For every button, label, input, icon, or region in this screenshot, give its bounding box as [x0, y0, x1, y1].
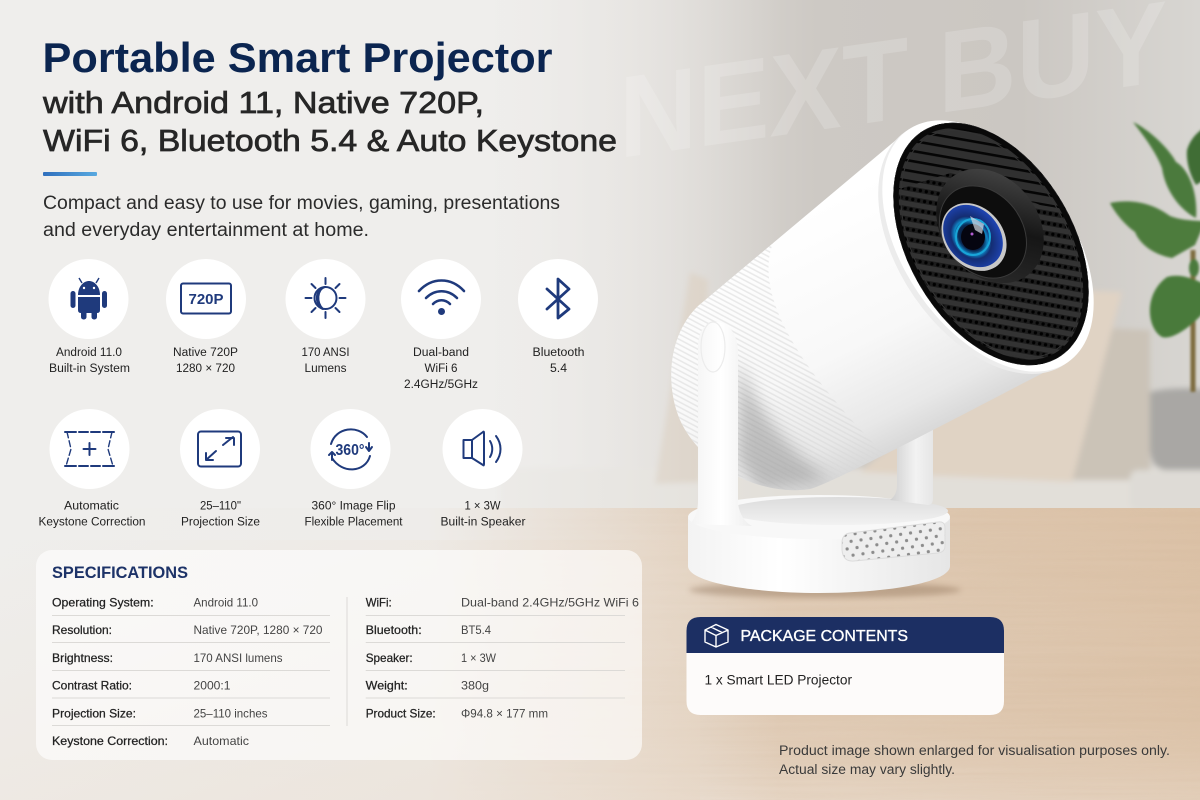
spec table: right column: Bluetooth:: [366, 623, 422, 637]
spec table: left column: 2000:1: [194, 678, 231, 692]
feature: Android 11.0: [48, 259, 130, 375]
subtitle: with Android 11, Native 720P,: [42, 85, 484, 120]
subtitle: WiFi 6, Bluetooth 5.4 & Auto Keystone: [43, 123, 617, 158]
feature: Native 720P: Native 720P: [173, 347, 238, 359]
feature: Bluetooth 5.4: [518, 259, 598, 375]
feature: Dual-band WiFi 6: Dual-band: [413, 347, 469, 359]
feature: 170 ANSI Lumens: 170 ANSI: [302, 347, 350, 359]
feature: Automatic Keystone Correction: Keystone Correction: [38, 516, 146, 528]
feature: Automatic Keystone Correction: Automatic: [64, 500, 119, 512]
feature: Built-in Speaker: Built-in Speaker: [440, 516, 526, 528]
feature: 360 Image Flip: Flexible Placement: [304, 516, 403, 528]
spec table: left column: [52, 596, 323, 748]
spec table: right column: WiFi:: [366, 596, 392, 610]
icon: package box: [705, 624, 728, 647]
feature: 360 Image Flip: 360° Image Flip: [312, 500, 396, 512]
heading: specifications: SPECIFICATIONS: [52, 564, 188, 582]
icon: android robot: [70, 278, 107, 320]
icon: 720P screen: 720P: [188, 291, 224, 308]
feature: 170 ANSI Lumens: Lumens: [304, 363, 347, 375]
spec table: right column: BT5.4: [461, 623, 491, 637]
spec table: left column: Projection Size:: [52, 706, 136, 720]
spec table: right column: [366, 596, 639, 720]
feature: Projection Size: 25–110": [200, 500, 241, 512]
icon: rotation arrows: 360°: [336, 442, 364, 459]
background: blurred sofa and plant: [500, 122, 1200, 518]
accent rule: [43, 172, 97, 176]
feature: 170 ANSI Lumens: [286, 259, 366, 375]
intro text: [43, 193, 560, 241]
front support arm: [690, 322, 752, 526]
package heading: PACKAGE CONTENTS: [740, 628, 908, 645]
spec table: right column: 380g: [461, 678, 489, 692]
feature: Built-in Speaker: [440, 409, 526, 528]
projector front rim: [834, 82, 1137, 413]
spec table: right column: Weight:: [366, 678, 408, 692]
icon: diagonal screen arrows: [198, 432, 241, 466]
spec table: left column: Brightness:: [52, 651, 113, 665]
rear support arm: [890, 425, 933, 505]
footnote: Product image shown enlarged for visualisation purposes only.: [779, 743, 1170, 758]
title: Portable Smart Projector: [42, 34, 552, 81]
feature: Native 720P: 1280 × 720: [176, 363, 235, 375]
spec table: right column: Φ94.8 × 177 mm: [461, 706, 548, 720]
background: left fade: [0, 0, 780, 800]
icon: sun: [306, 278, 346, 318]
intro text: and everyday entertainment at home.: [43, 220, 369, 241]
feature: Dual-band WiFi 6: WiFi 6: [424, 363, 458, 375]
icon: wifi: [419, 280, 464, 315]
icon: bluetooth: [547, 279, 569, 318]
base speaker grille: [842, 522, 945, 561]
feature: Automatic Keystone Correction: [38, 409, 146, 528]
feature: Dual-band WiFi 6: [401, 259, 481, 391]
spec table: left column: Contrast Ratio:: [52, 678, 132, 692]
feature: Dual-band WiFi 6: 2.4GHz/5GHz: [404, 379, 478, 391]
spec table: left column: Native 720P, 1280 × 720: [194, 623, 323, 637]
intro text: Compact and easy to use for movies, gaming, presentations: [43, 193, 560, 214]
icon: speaker: [464, 432, 500, 465]
shadow under base: [689, 582, 961, 598]
spec table: right column: Product Size:: [366, 706, 436, 720]
projector base: [688, 495, 950, 593]
feature: Bluetooth 5.4: 5.4: [550, 363, 568, 375]
spec table: left column: Keystone Correction:: [52, 734, 168, 748]
feature: Android 11.0: Built-in System: [49, 363, 130, 375]
feature: Projection Size: [180, 409, 260, 528]
product: white projector: [671, 120, 1094, 600]
feature: Built-in Speaker: 1 × 3W: [464, 500, 501, 512]
footnote: [779, 743, 1170, 777]
package header bar: [686, 617, 1004, 653]
spec table: right column: 1 × 3W: [461, 651, 497, 665]
feature: 360 Image Flip: [304, 409, 403, 528]
feature: Android 11.0: Android 11.0: [56, 347, 122, 359]
background: wooden table: [0, 508, 1200, 800]
projector body: [650, 140, 1045, 500]
feature: Native 720P: [166, 259, 246, 375]
spec table: right column: Speaker:: [366, 651, 413, 665]
spec table: left column: 25–110 inches: [194, 706, 268, 720]
panel: specifications: [36, 550, 642, 760]
panel: package contents: [686, 617, 1004, 715]
background: warm lower glow: [0, 540, 700, 800]
spec table: left column: Operating System:: [52, 596, 154, 610]
projector speaker mesh face: [893, 122, 1089, 366]
footnote: Actual size may vary slightly.: [779, 762, 955, 777]
projector lens: [914, 148, 1066, 304]
icon: keystone frame: [65, 432, 114, 466]
spec table: left column: 170 ANSI lumens: [194, 651, 282, 665]
feature: Bluetooth 5.4: Bluetooth: [532, 347, 584, 359]
spec table: left column: Automatic: [194, 734, 249, 748]
spec table: right column: Dual-band 2.4GHz/5GHz WiFi 6: [461, 596, 639, 610]
feature: Projection Size: Projection Size: [181, 516, 260, 528]
spec table: left column: Android 11.0: [194, 596, 258, 610]
subtitle: [42, 85, 617, 158]
package item: 1 x Smart LED Projector: [704, 672, 853, 688]
spec table: left column: Resolution:: [52, 623, 112, 637]
